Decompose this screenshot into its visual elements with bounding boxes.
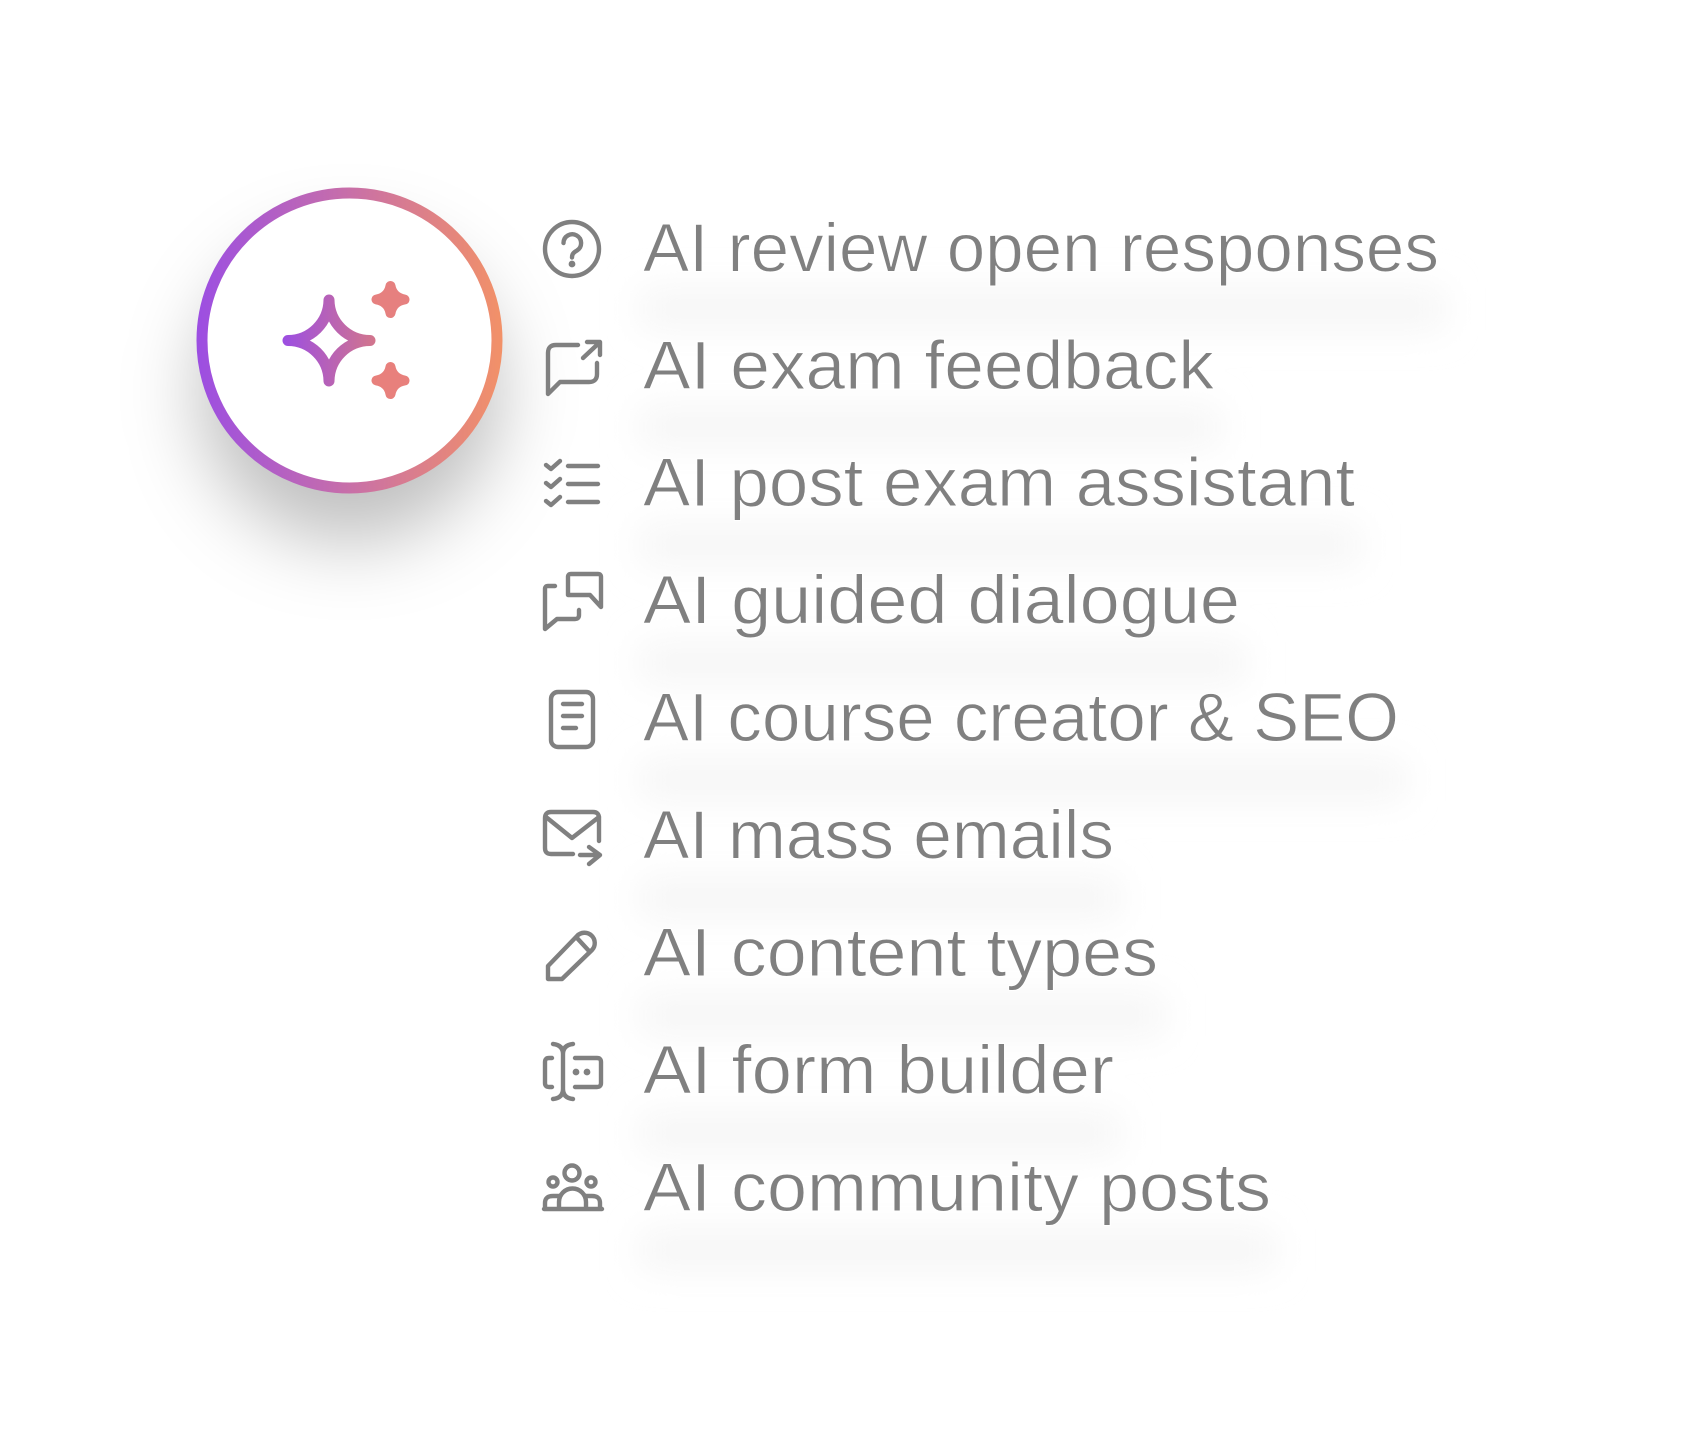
row: AI exam feedback <box>548 327 1215 404</box>
label: AI exam feedback <box>643 327 1215 404</box>
icon: form field cursor <box>545 1044 601 1099</box>
row: AI course creator & SEO <box>551 679 1399 756</box>
gradient ring <box>202 193 497 488</box>
icon: small sparkle top <box>376 286 404 313</box>
text soft shadows <box>640 288 1445 1271</box>
icon: people group <box>544 1166 602 1209</box>
feature list <box>544 210 1439 1226</box>
row: AI content types <box>548 914 1158 991</box>
icon: large sparkle <box>288 300 370 381</box>
icon: envelope with arrow <box>545 812 600 864</box>
icon: checklist <box>546 461 598 505</box>
row: AI review open responses <box>545 210 1439 286</box>
label: AI post exam assistant <box>643 444 1355 521</box>
icon: two chat bubbles <box>545 574 601 629</box>
icon: question mark <box>545 222 599 276</box>
label: AI course creator & SEO <box>643 679 1399 756</box>
label: AI content types <box>643 914 1158 991</box>
row: AI form builder <box>545 1032 1114 1108</box>
label: AI form builder <box>643 1032 1114 1108</box>
circle badge with sparkle icon <box>200 193 500 542</box>
row: AI post exam assistant <box>546 444 1355 521</box>
label: AI community posts <box>643 1149 1271 1226</box>
icon: chat with external arrow <box>548 342 600 394</box>
label: AI mass emails <box>643 796 1114 874</box>
row: AI community posts <box>544 1149 1271 1226</box>
row: AI mass emails <box>545 796 1114 874</box>
row: AI guided dialogue <box>545 562 1240 638</box>
icon: pencil <box>548 933 595 979</box>
icon: document <box>551 692 593 747</box>
label: AI review open responses <box>643 210 1439 286</box>
label: AI guided dialogue <box>643 562 1240 638</box>
icon: small sparkle bottom <box>376 367 404 394</box>
badge drop shadow <box>200 242 500 542</box>
